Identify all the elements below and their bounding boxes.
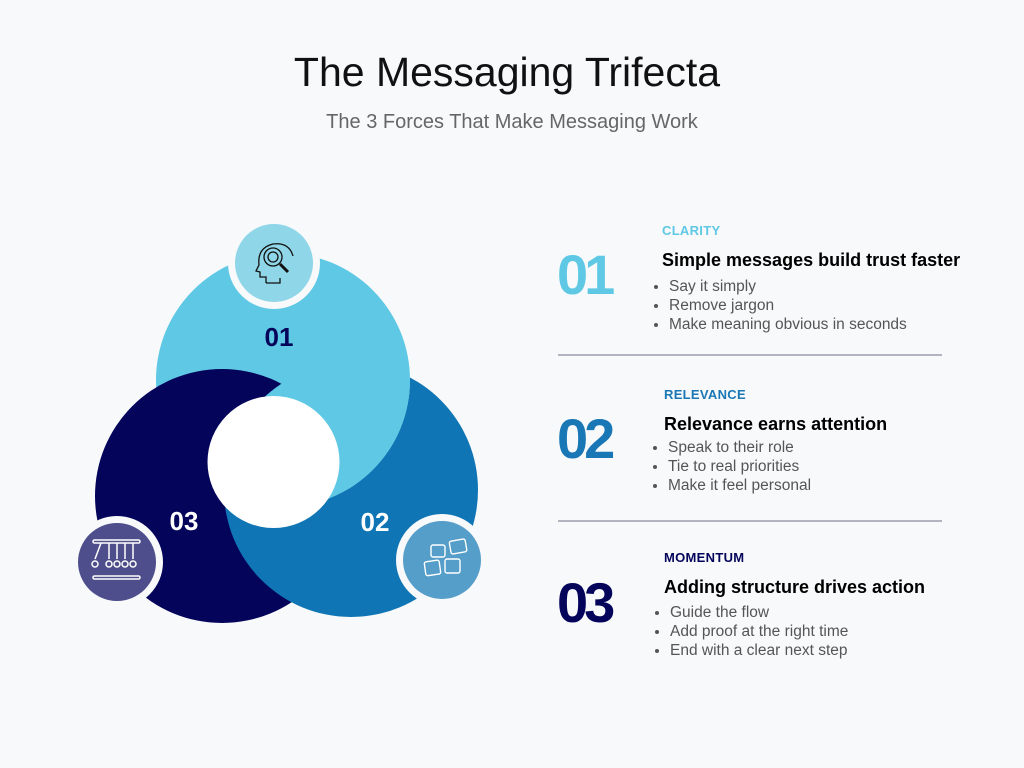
bullets: Make meaning obvious in seconds	[669, 316, 907, 333]
label momentum: MOMENTUM	[664, 550, 744, 565]
bullets: Speak to their role	[668, 439, 794, 456]
heading: Simple messages build trust faster	[662, 250, 960, 270]
icon: newton's cradle	[71, 516, 163, 608]
bullets: Tie to real priorities	[668, 458, 799, 475]
center hole	[208, 396, 340, 528]
trifecta diagram	[78, 224, 481, 623]
bullets: Make it feel personal	[668, 477, 811, 494]
heading: Relevance earns attention	[664, 414, 887, 434]
label 02: 02	[361, 507, 389, 537]
bullets: Guide the flow	[670, 604, 769, 621]
icon: head with magnifier	[228, 217, 320, 309]
label 03: 03	[170, 506, 198, 536]
icon: puzzle pieces	[396, 514, 488, 606]
bullets: Add proof at the right time	[670, 623, 848, 640]
number 02: 02	[557, 407, 611, 470]
title: The Messaging Trifecta	[294, 49, 720, 95]
clarity overlap over momentum right of hole	[328, 430, 400, 499]
section 02: relevance	[557, 387, 887, 494]
bullets	[653, 439, 811, 494]
bullets: Say it simply	[669, 278, 756, 295]
circle 02 relevance	[224, 363, 478, 617]
clarity overlap over relevance	[264, 384, 410, 499]
bullets: Remove jargon	[669, 297, 774, 314]
label clarity: CLARITY	[662, 223, 720, 238]
section 03: momentum	[557, 550, 925, 659]
section 01: clarity	[557, 223, 960, 333]
subtitle: The 3 Forces That Make Messaging Work	[326, 111, 698, 133]
number 03: 03	[557, 571, 611, 634]
heading: Adding structure drives action	[664, 577, 925, 597]
label relevance: RELEVANCE	[664, 387, 746, 402]
bullets	[654, 278, 907, 333]
number 01: 01	[557, 243, 611, 306]
bullets: End with a clear next step	[670, 642, 848, 659]
circle 01 clarity	[156, 253, 410, 507]
bullets	[655, 604, 848, 659]
circle 03 momentum	[95, 369, 349, 623]
label 01: 01	[265, 322, 293, 352]
